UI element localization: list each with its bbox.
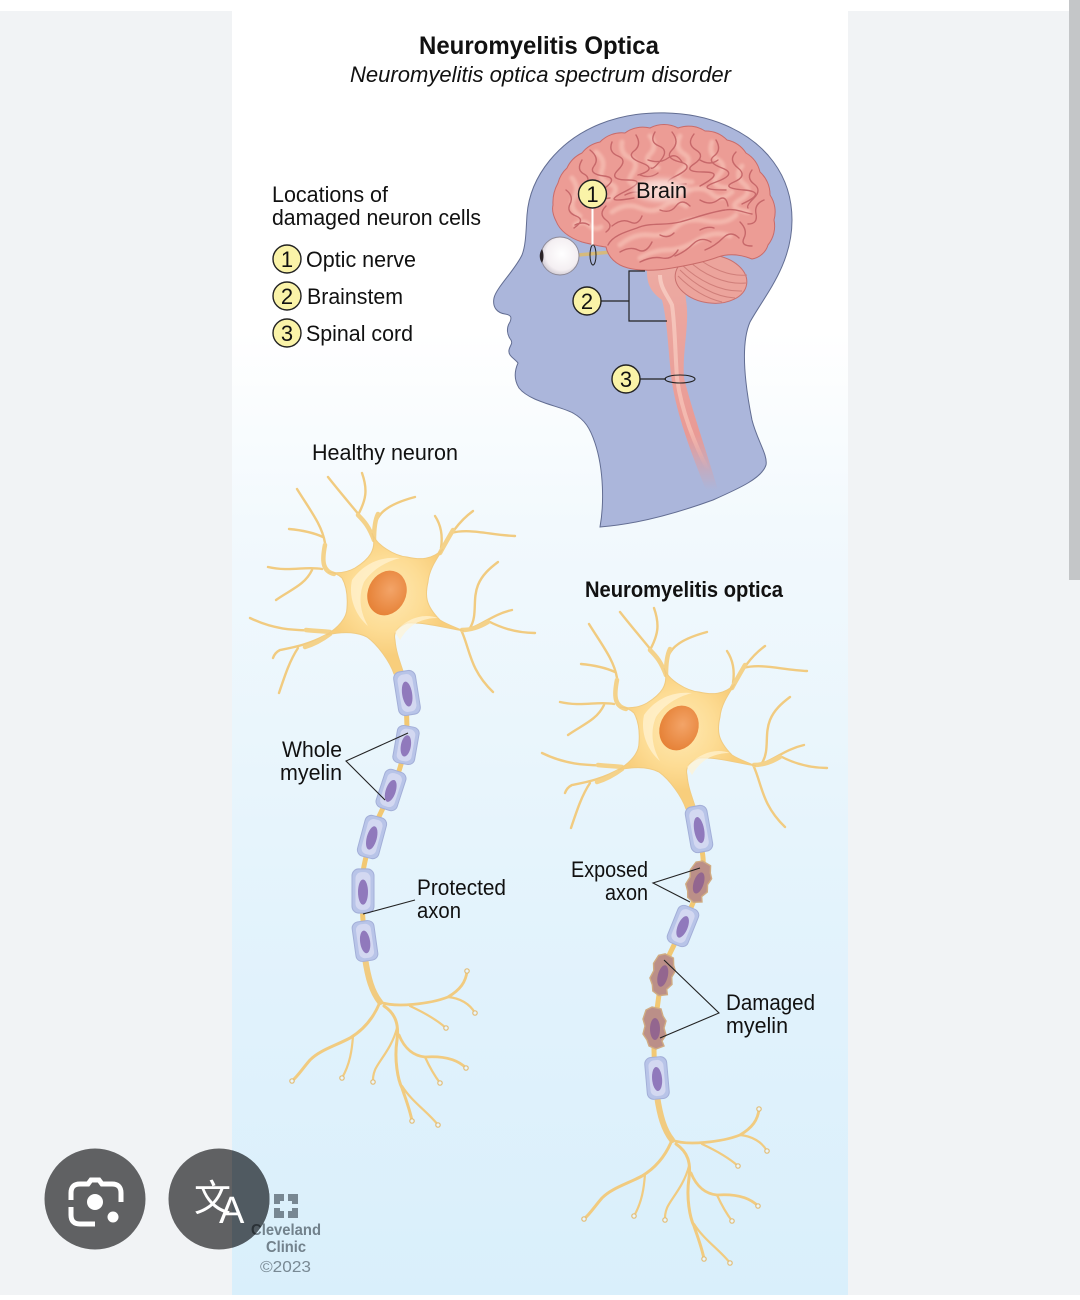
callout: whole myelin — [280, 733, 408, 800]
logo mark — [274, 1194, 298, 1218]
subtitle: Neuromyelitis optica spectrum disorder — [350, 62, 733, 87]
head silhouette — [494, 113, 792, 527]
logo: Cleveland Clinic: ©2023 — [260, 1259, 311, 1276]
legend item 2: brainstem: 2 — [281, 284, 293, 309]
brain — [553, 125, 775, 270]
marker 1: optic nerve: 1 — [586, 182, 599, 207]
legend heading: damaged neuron cells — [272, 205, 481, 230]
icon: lens button — [44, 1148, 146, 1250]
heading: neuromyelitis optica: Neuromyelitis optica — [585, 577, 784, 602]
head and brain illustration — [494, 113, 792, 527]
callout: exposed axon — [571, 857, 700, 905]
legend item 3: spinal cord: 3 — [281, 321, 293, 346]
axon — [654, 805, 703, 1102]
axon — [362, 672, 407, 962]
cerebellum — [672, 250, 750, 308]
damaged myelin sheaths — [643, 858, 716, 1049]
legend item 2: brainstem: Brainstem — [307, 284, 403, 309]
scrollbar — [1069, 0, 1080, 580]
icon: translate button — [168, 1148, 270, 1250]
legend: locations of damaged neuron cells — [272, 182, 481, 347]
whole myelin sheaths — [351, 670, 421, 962]
callout: protected axon: Protected — [417, 875, 506, 900]
axon terminal branches — [582, 1096, 769, 1265]
icon: translate button: 文 — [194, 1178, 231, 1219]
brainstem and spinal cord — [647, 265, 718, 490]
cell body and dendrites — [542, 608, 827, 828]
legend heading — [272, 182, 481, 230]
callout: protected axon — [363, 875, 506, 923]
marker 2: brainstem bracket — [573, 271, 667, 321]
legend item 1: optic nerve — [273, 245, 416, 273]
title: Neuromyelitis Optica — [419, 32, 660, 60]
marker 3: spinal cord — [612, 365, 695, 393]
callout: damaged myelin: myelin — [726, 1013, 788, 1038]
legend heading: Locations of — [272, 182, 389, 207]
heading: healthy neuron: Healthy neuron — [312, 440, 458, 465]
healthy neuron illustration — [250, 473, 535, 1127]
logo: Cleveland Clinic: Clinic — [266, 1239, 306, 1256]
legend item 2: brainstem — [273, 282, 403, 310]
legend item 3: spinal cord — [273, 319, 413, 347]
marker 3: spinal cord: 3 — [620, 367, 632, 392]
legend item 3: spinal cord: Spinal cord — [306, 321, 413, 346]
icon: translate button: A — [219, 1190, 245, 1232]
callout: protected axon: axon — [417, 898, 461, 923]
legend item 1: optic nerve: Optic nerve — [306, 247, 416, 272]
callout: whole myelin: Whole — [282, 737, 342, 762]
callout: damaged myelin: Damaged — [726, 990, 815, 1015]
logo: Cleveland Clinic: Cleveland — [251, 1222, 321, 1239]
callout: damaged myelin — [660, 960, 815, 1038]
logo: Cleveland Clinic — [251, 1194, 321, 1276]
axon terminal branches — [290, 958, 477, 1127]
callout: exposed axon: axon — [605, 880, 648, 905]
marker 2: brainstem bracket: 2 — [581, 289, 593, 314]
panel: infographic background — [232, 11, 848, 1295]
optic nerve — [578, 252, 612, 255]
marker 1: optic nerve — [578, 180, 606, 265]
myelin sheaths — [644, 804, 714, 1100]
callout: exposed axon: Exposed — [571, 857, 648, 882]
cell body and dendrites — [250, 473, 535, 693]
eyeball — [540, 237, 579, 275]
neuromyelitis optica neuron illustration — [542, 608, 827, 1265]
legend item 1: optic nerve: 1 — [281, 247, 293, 272]
callout: whole myelin: myelin — [280, 760, 342, 785]
label: brain: Brain — [636, 178, 687, 203]
